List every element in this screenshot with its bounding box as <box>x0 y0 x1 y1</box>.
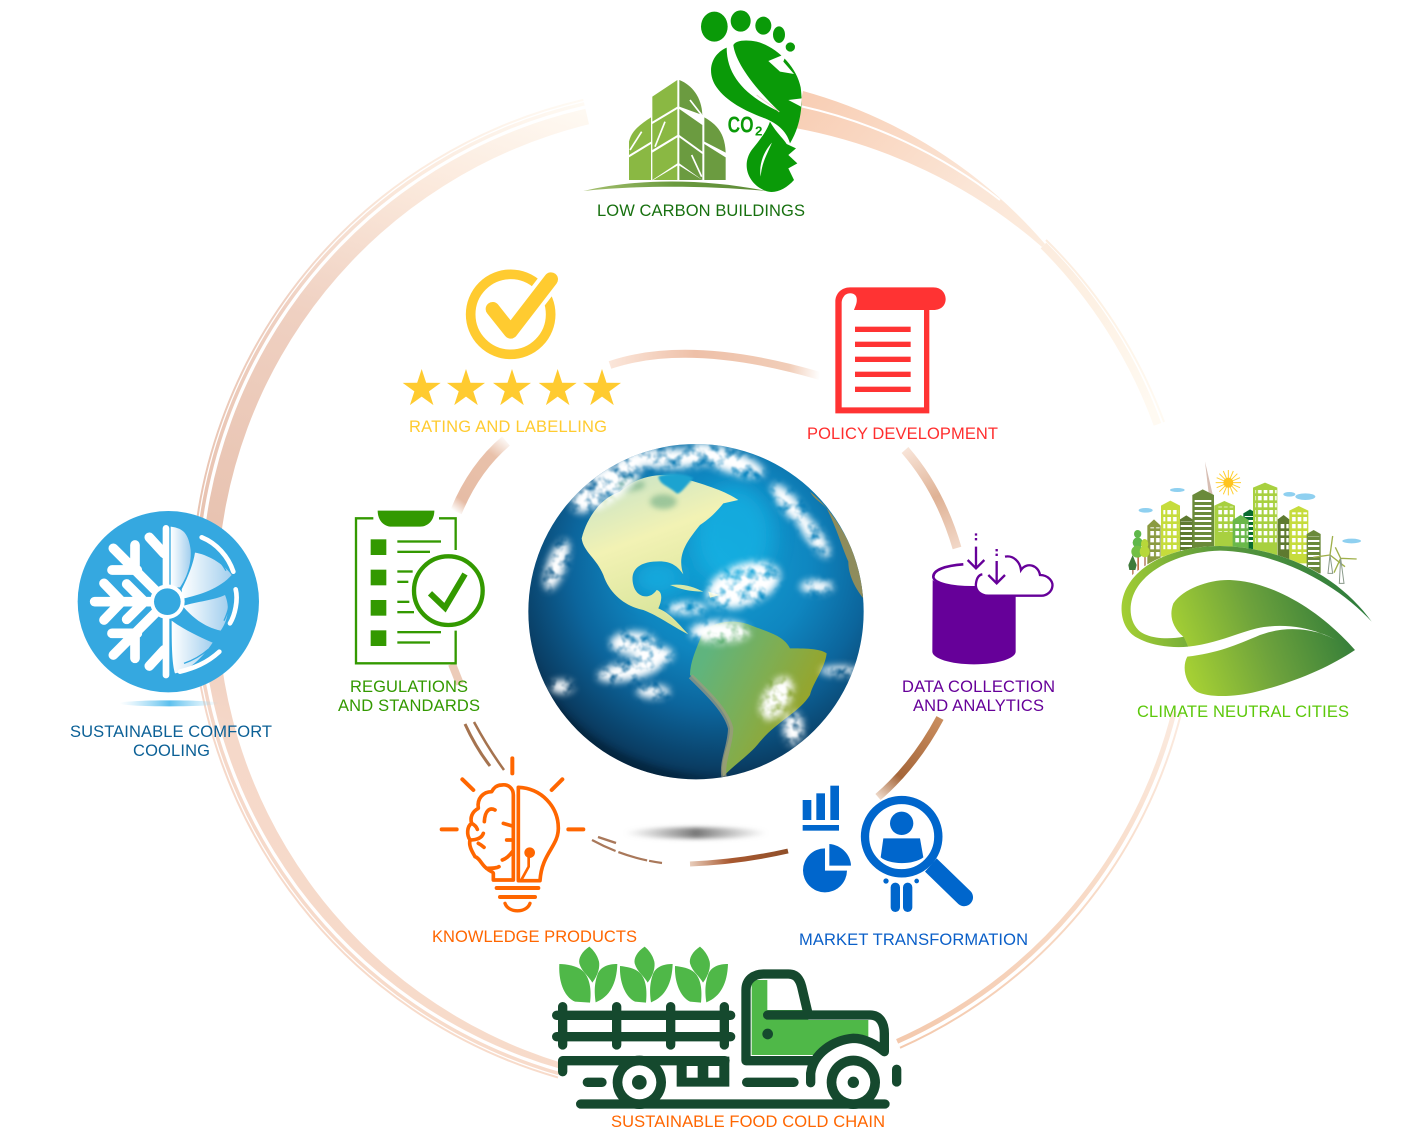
clipboard frame <box>356 518 456 663</box>
cab glass and body <box>752 980 868 1055</box>
truck fence <box>557 1007 731 1045</box>
label: market transformation: MARKET TRANSFORMATION <box>799 931 1028 949</box>
globe: africa edge <box>810 492 867 598</box>
inner ring: upper-right stroke <box>905 450 957 548</box>
person <box>881 812 923 912</box>
cab outline <box>746 974 884 1083</box>
outer ring: bottom-right arc <box>897 711 1181 1048</box>
globe: caribbean islands <box>670 585 720 598</box>
label: regulations and standards: AND STANDARDS <box>338 697 480 715</box>
label: data collection and analytics: DATA COLLECTION <box>902 678 1055 696</box>
inner ring <box>452 354 957 864</box>
icon: low carbon buildings: 2 <box>755 124 762 139</box>
outer ring: left arc <box>192 100 589 1077</box>
wind turbines <box>1313 536 1357 583</box>
inner ring: lower-right stroke <box>878 718 940 797</box>
brain half <box>468 785 513 880</box>
truck bed <box>563 1057 729 1087</box>
swoosh stem <box>1122 546 1372 647</box>
icon: knowledge bulb <box>442 758 583 911</box>
fan disc <box>78 511 259 692</box>
label: regulations and standards <box>338 678 480 715</box>
bulb half <box>518 787 558 881</box>
inner ring: top stroke <box>610 354 820 376</box>
footprint sole leaf <box>711 41 802 143</box>
icon: rating and labelling <box>403 274 621 405</box>
globe: north america <box>582 475 738 634</box>
pie chart <box>803 844 851 892</box>
rating check mark <box>493 279 551 332</box>
globe: dark limb <box>552 698 702 780</box>
icon: food cold chain truck <box>557 947 897 1109</box>
ground arc <box>583 181 767 191</box>
globe <box>528 436 867 782</box>
upper leaf <box>1171 580 1355 650</box>
label: knowledge products: KNOWLEDGE PRODUCTS <box>432 928 637 946</box>
icon: data cylinder and cloud <box>932 533 1052 664</box>
label: data collection and analytics <box>902 678 1055 715</box>
label: sustainable comfort cooling <box>70 723 272 760</box>
base lines <box>497 888 538 897</box>
clipboard clip <box>378 511 434 527</box>
outer ring: top-right arc <box>795 91 1164 424</box>
download arrows <box>968 533 1005 583</box>
footprint toes <box>701 10 795 52</box>
city clouds <box>1139 488 1361 543</box>
icon: market transformation <box>803 786 973 912</box>
globe: clouds <box>539 436 860 745</box>
earth shadow <box>624 828 768 838</box>
inner ring: bottom stroke <box>690 851 788 864</box>
label: climate neutral cities: CLIMATE NEUTRAL CITIES <box>1137 703 1349 721</box>
white backing <box>1115 467 1377 700</box>
fan blades <box>171 527 232 673</box>
globe: northern forest tint <box>615 479 677 509</box>
label: regulations and standards: REGULATIONS <box>350 678 468 696</box>
label: sustainable comfort cooling: COOLING <box>133 742 210 760</box>
leaf veins <box>630 100 702 177</box>
icon: policy document <box>835 287 946 413</box>
light rays <box>442 758 583 829</box>
road lines <box>581 1069 897 1104</box>
globe: south america <box>690 622 827 777</box>
CO2 text: CO <box>728 112 754 138</box>
cab handle <box>762 1029 773 1039</box>
sun <box>1216 470 1241 495</box>
centre shaft <box>163 525 169 678</box>
icon: regulations clipboard <box>356 511 483 663</box>
cloud outline <box>976 556 1052 596</box>
trees <box>1128 530 1150 578</box>
city buildings <box>1147 483 1321 573</box>
lower leaf <box>1185 629 1355 696</box>
magnifier <box>865 800 973 906</box>
building blocks <box>629 80 726 180</box>
truck wheels <box>613 1056 880 1109</box>
globe: hudson bay <box>658 474 693 494</box>
inner ring: lower-left strokes <box>452 664 504 770</box>
label: sustainable food cold chain: SUSTAINABLE FOOD COLD CHAIN <box>611 1113 885 1131</box>
label: low carbon buildings: LOW CARBON BUILDINGS <box>597 202 805 220</box>
label: data collection and analytics: AND ANALYTICS <box>913 697 1044 715</box>
label: rating and labelling: RATING AND LABELLING <box>409 418 607 436</box>
truck leaves <box>559 947 728 1003</box>
icon: low carbon buildings <box>583 10 802 192</box>
fan shadow <box>119 700 219 706</box>
inner ring: bottom-left strokes <box>592 837 662 863</box>
rating check ring <box>471 274 551 354</box>
hub <box>150 584 185 619</box>
globe: bright ocean <box>630 485 773 598</box>
filament <box>522 849 534 879</box>
bar chart <box>803 786 839 831</box>
smoke streak <box>1205 462 1214 500</box>
globe: andes edge <box>691 676 731 777</box>
icon: climate neutral cities <box>1115 462 1377 700</box>
icon: comfort cooling fan <box>78 511 259 706</box>
checklist rows <box>371 539 441 646</box>
check badge <box>414 556 483 625</box>
footprint heel leaf <box>747 122 797 192</box>
snowflake <box>95 537 164 666</box>
inner ring: upper-left stroke <box>456 441 506 512</box>
rating stars <box>403 369 621 405</box>
label: sustainable comfort cooling: SUSTAINABLE COMFORT <box>70 723 272 741</box>
hill mask <box>1120 546 1377 660</box>
label: policy development: POLICY DEVELOPMENT <box>807 425 998 443</box>
blade accent lines <box>184 547 230 663</box>
outer ring <box>192 91 1181 1078</box>
blade tip arcs <box>180 537 237 672</box>
cylinder <box>932 564 1016 664</box>
